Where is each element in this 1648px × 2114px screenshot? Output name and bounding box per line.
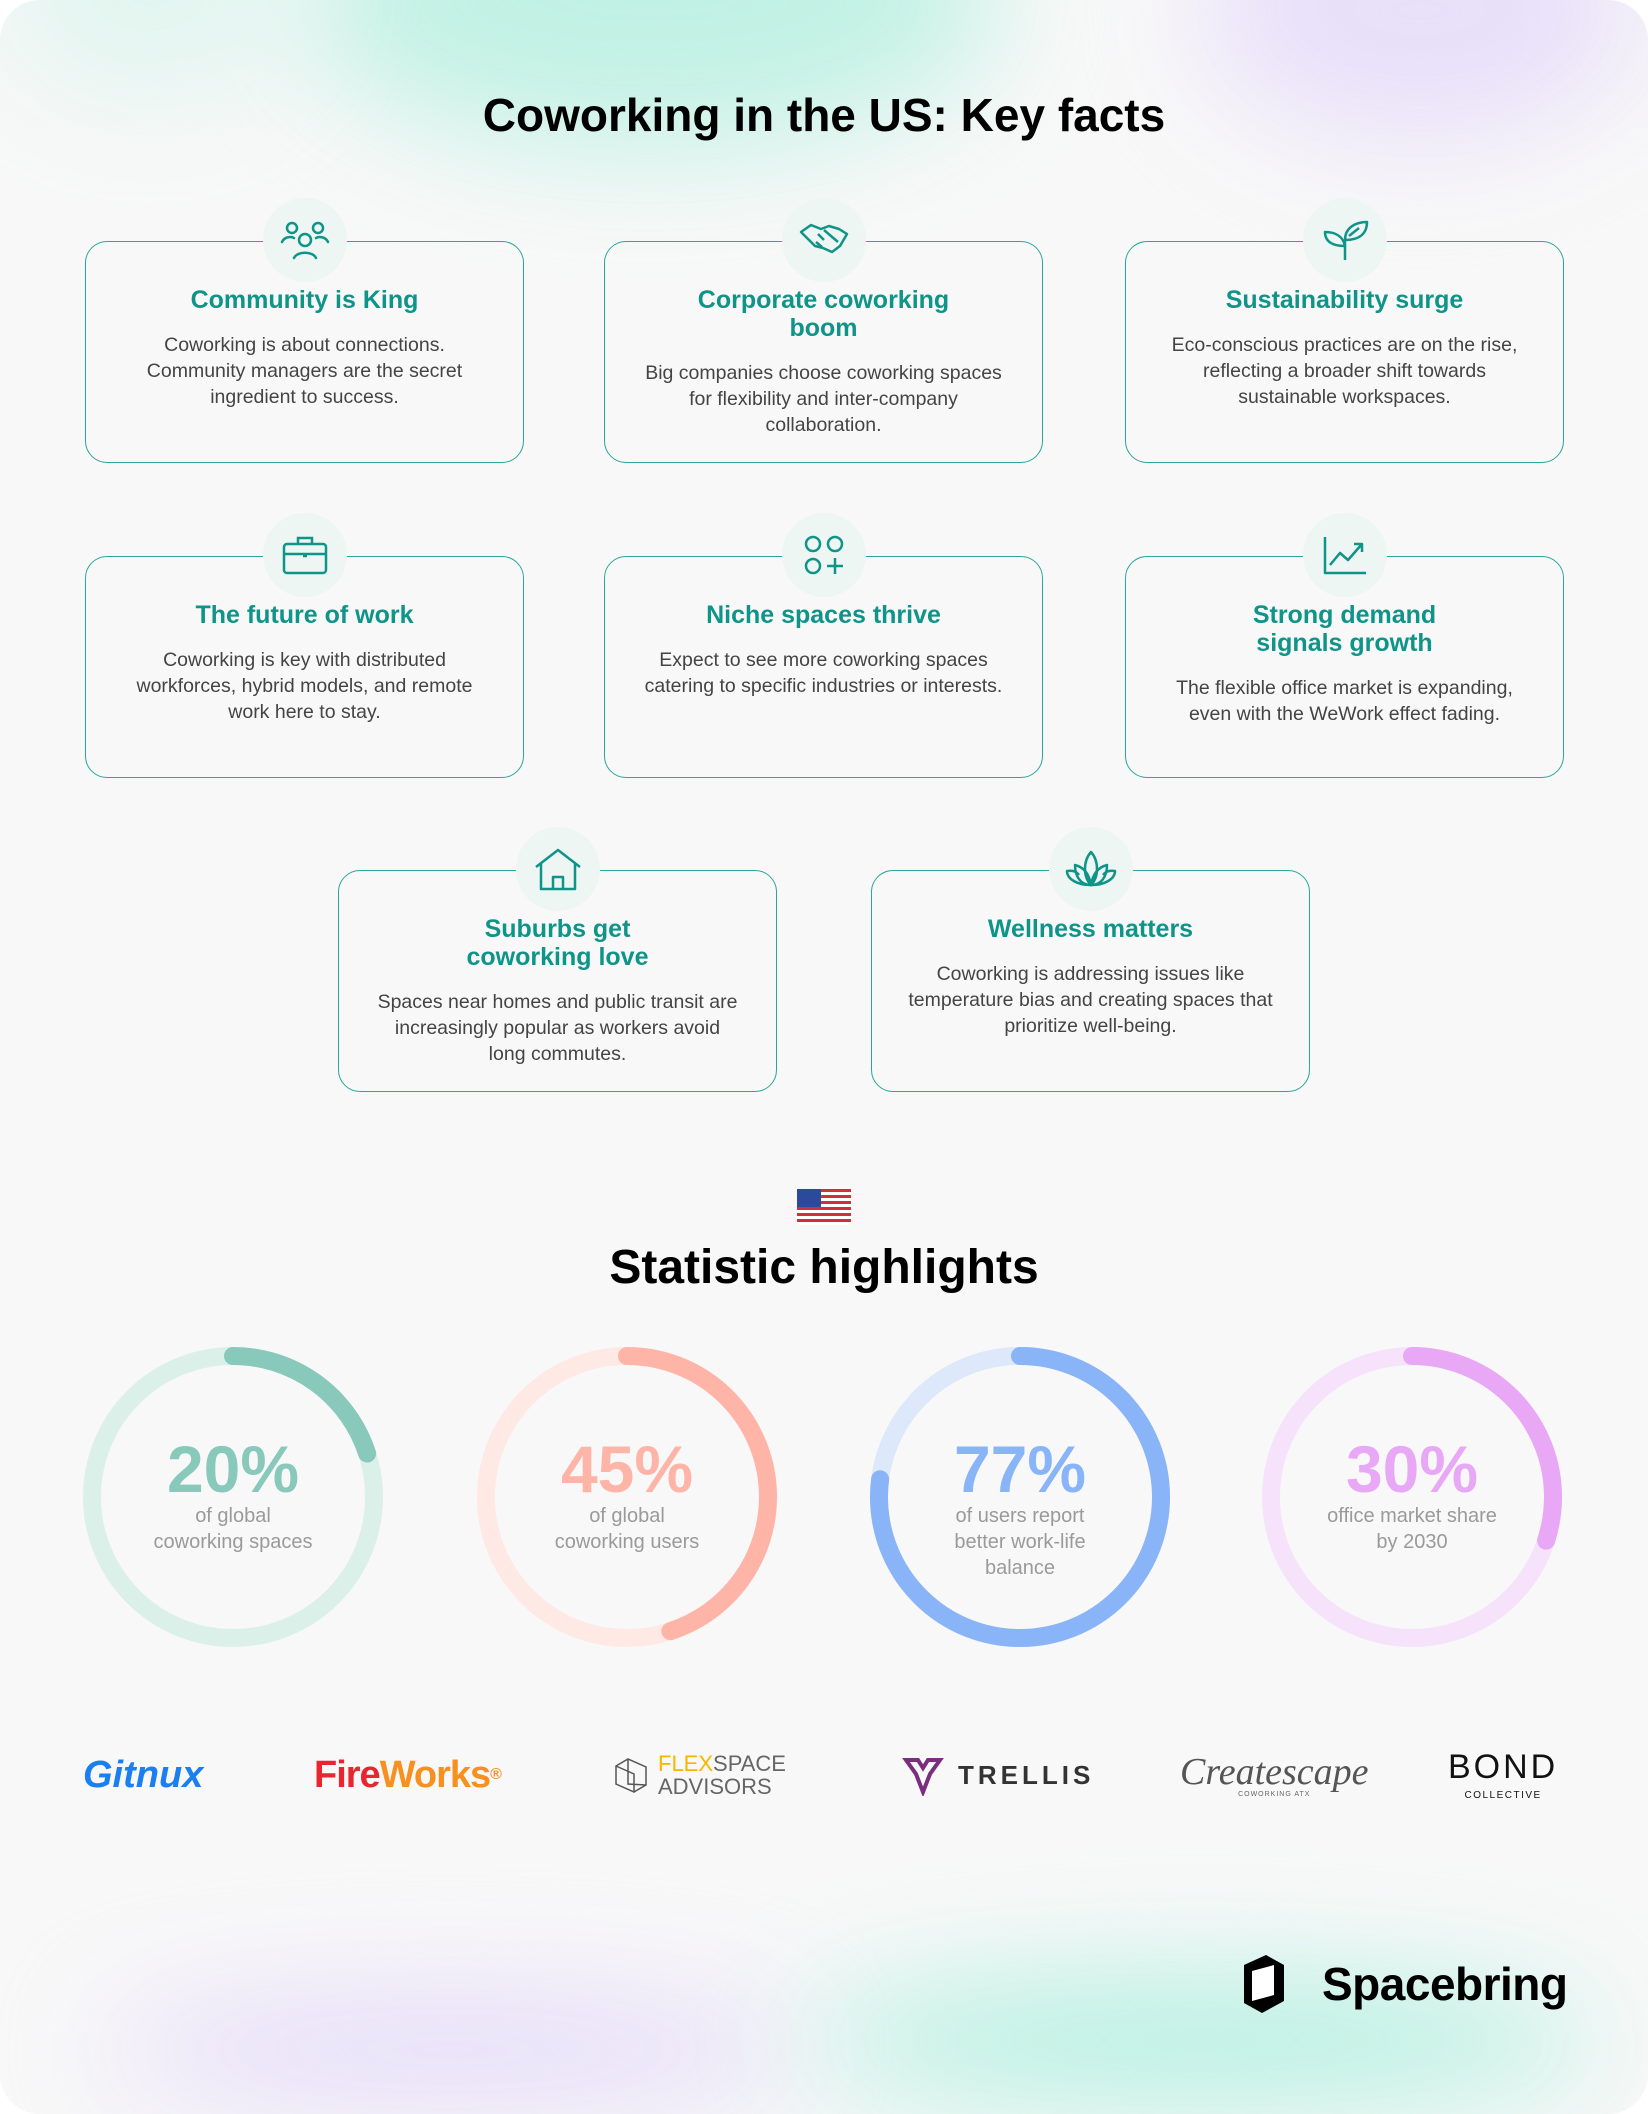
stat ring: 20% [83, 1347, 383, 1647]
logo: createscape: Createscape [1180, 1750, 1369, 1792]
logo: flexspace: FLEXSPACE [658, 1751, 786, 1776]
card: suburbs: Spaces near homes and public transit are increasingly popular as workers avoid long commutes. [378, 991, 737, 1065]
card: sustainability: Eco-conscious practices are on the rise, reflecting a broader shift towards sustainable workspaces. [1172, 334, 1517, 408]
logo: bond: BOND [1448, 1748, 1558, 1786]
logo: bond: COLLECTIVE [1464, 1790, 1542, 1800]
card: niche [604, 556, 1043, 778]
card: wellness: Wellness matters [988, 915, 1193, 943]
stat ring: 30%: 30% [1346, 1432, 1478, 1506]
card: demand: Strong demand [1253, 601, 1436, 629]
icon: US flag [797, 1189, 851, 1222]
stat ring: 20%: coworking spaces [154, 1531, 312, 1553]
icon: people [263, 198, 347, 282]
card: community: Community is King [191, 286, 418, 314]
icon: leaves [1303, 198, 1387, 282]
card: community: Coworking is about connections. Community managers are the secret ingredient to success. [147, 334, 462, 408]
icon: lotus [1049, 827, 1133, 911]
logo: gitnux: Gitnux [83, 1754, 203, 1796]
card: demand [1125, 556, 1564, 778]
heading: statistic highlights: Statistic highlights [609, 1241, 1039, 1294]
stat ring: 20%: 20% [167, 1432, 299, 1506]
card: suburbs: Suburbs get [485, 915, 630, 943]
logo: createscape: COWORKING ATX [1238, 1790, 1310, 1798]
stat ring: 77%: balance [985, 1557, 1055, 1579]
logo: fireworks [314, 1754, 502, 1796]
logo: flexspace: ADVISORS [658, 1774, 772, 1799]
logo: fireworks: ® [490, 1766, 501, 1783]
card: suburbs [338, 870, 777, 1092]
stat ring: 77% [870, 1347, 1170, 1647]
stat ring: 45%: of global [589, 1505, 665, 1527]
card: community [85, 241, 524, 463]
stat ring: 30%: office market share [1327, 1505, 1497, 1527]
logo: flexspace [615, 1751, 786, 1799]
title: Coworking in the US: Key facts [483, 89, 1165, 141]
card: future of work: Coworking is key with distributed workforces, hybrid models, and remote work here to stay. [136, 649, 472, 723]
logo: fireworks: Fire [314, 1754, 380, 1796]
logo: fireworks: Works [380, 1754, 490, 1796]
stat ring: 77%: better work-life [954, 1531, 1086, 1553]
card: wellness [871, 870, 1310, 1092]
stat ring: 45%: 45% [561, 1432, 693, 1506]
icon: house [516, 827, 600, 911]
card: corporate: Big companies choose coworking spaces for flexibility and inter-company collaboration. [645, 362, 1002, 436]
card: future of work: The future of work [195, 601, 414, 629]
card: wellness: Coworking is addressing issues like temperature bias and creating spaces that prioritize well-being. [908, 963, 1273, 1037]
logo: spacebring [1244, 1955, 1568, 2013]
card: sustainability [1125, 241, 1564, 463]
stat ring: 77%: of users report [956, 1505, 1084, 1527]
stat ring: 30% [1262, 1347, 1562, 1647]
card: corporate: Corporate coworking [698, 286, 949, 314]
card: demand: signals growth [1256, 629, 1433, 657]
stat ring: 20%: of global [195, 1505, 271, 1527]
stat ring: 45%: coworking users [555, 1531, 699, 1553]
card: niche: Niche spaces thrive [706, 601, 941, 629]
stat ring: 45% [477, 1347, 777, 1647]
stat ring: 30%: by 2030 [1376, 1531, 1448, 1553]
card: corporate: boom [789, 314, 858, 342]
icon: briefcase [263, 513, 347, 597]
card: corporate [604, 241, 1043, 463]
logo: trellis [902, 1758, 1094, 1796]
icon: shapes [782, 513, 866, 597]
card: suburbs: coworking love [466, 943, 648, 971]
card: sustainability: Sustainability surge [1226, 286, 1463, 314]
stat ring: 77%: 77% [954, 1432, 1086, 1506]
logo: spacebring: Spacebring [1322, 1958, 1568, 2010]
card: niche: Expect to see more coworking spaces catering to specific industries or interests. [645, 649, 1002, 697]
card: demand: The flexible office market is expanding, even with the WeWork effect fading. [1176, 677, 1513, 725]
logo: trellis: TRELLIS [958, 1760, 1094, 1790]
icon: chart [1303, 513, 1387, 597]
card: future of work [85, 556, 524, 778]
icon: handshake [782, 198, 866, 282]
